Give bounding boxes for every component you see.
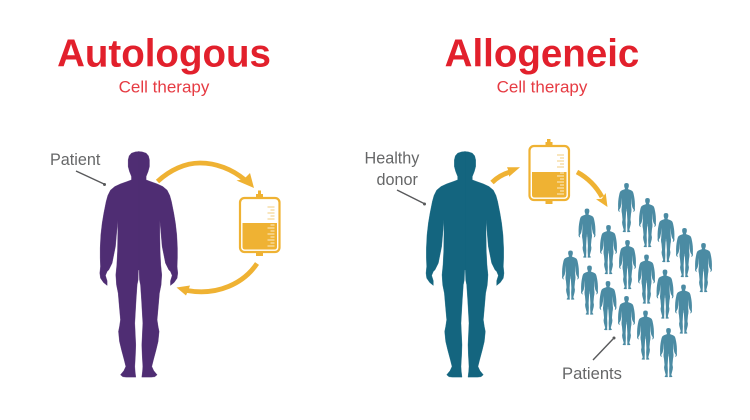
arrow: bag to patient xyxy=(176,264,257,296)
figure: healthy donor body xyxy=(426,152,504,377)
heading: Autologous: Autologous xyxy=(57,32,271,76)
subheading: Allogeneic cell therapy: Cell therapy xyxy=(497,78,588,96)
icon: blood bag, autologous xyxy=(240,190,280,256)
label: Patient: Patient xyxy=(50,151,101,169)
leader line: Healthy donor xyxy=(397,190,426,206)
heading: Allogeneic: Allogeneic xyxy=(445,32,639,76)
label: Healthy donor: Healthy xyxy=(364,150,420,168)
leader line: Patients xyxy=(593,336,616,360)
label: Patients: Patients xyxy=(562,364,622,383)
leader line: Patient xyxy=(76,171,106,186)
label: Healthy donor: donor xyxy=(376,171,419,189)
arrow: donor to bag xyxy=(492,167,520,182)
icon: blood bag, allogeneic xyxy=(530,139,569,204)
arrow: bag to patients xyxy=(577,172,608,207)
figure: patient body xyxy=(100,152,178,377)
subheading: Autologous cell therapy: Cell therapy xyxy=(119,78,210,96)
arrow: patient to bag xyxy=(158,163,254,188)
figures: group of patients xyxy=(562,183,712,377)
